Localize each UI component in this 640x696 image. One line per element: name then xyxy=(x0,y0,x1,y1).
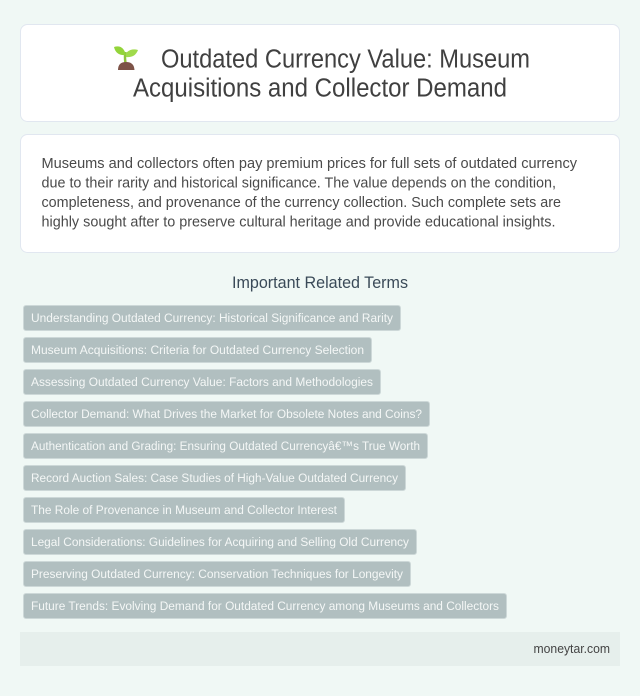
panel: description xyxy=(20,134,620,252)
list: related term tags: Collector Demand: What Drives the Market for Obsolete Notes and Coins? xyxy=(31,407,422,421)
title text: Acquisitions and Collector Demand xyxy=(133,74,507,102)
panel: description: completeness, and provenance of the currency collection. Such complete sets are xyxy=(42,194,561,211)
title text xyxy=(133,46,530,102)
panel: title card xyxy=(20,24,620,122)
list: related term tags: Understanding Outdated Currency: Historical Significance and Rarity xyxy=(31,311,394,325)
title text: Outdated Currency Value: Museum xyxy=(161,46,530,74)
footer: moneytar.com xyxy=(534,642,610,656)
footer xyxy=(20,632,620,666)
list: related term tags: Legal Considerations: Guidelines for Acquiring and Selling Old Currency xyxy=(31,535,410,549)
list: related term tags: Assessing Outdated Currency Value: Factors and Methodologies xyxy=(31,375,373,389)
icon: seedling xyxy=(114,46,138,70)
heading: related terms: Important Related Terms xyxy=(232,274,408,292)
list: related term tags: Authentication and Grading: Ensuring Outdated Currencyâ€™s True Worth xyxy=(31,439,420,453)
panel: description: Museums and collectors often pay premium prices for full sets of outdated currency xyxy=(42,155,577,172)
list: related term tags: Museum Acquisitions: Criteria for Outdated Currency Selection xyxy=(31,343,364,357)
panel: description: highly sought after to preserve cultural heritage and provide educational insights. xyxy=(42,214,556,230)
panel: description: due to their rarity and historical significance. The value depends on the condition, xyxy=(42,174,556,192)
list: related term tags: Record Auction Sales: Case Studies of High-Value Outdated Currency xyxy=(31,471,399,485)
list: related term tags: Preserving Outdated Currency: Conservation Techniques for Longevity xyxy=(31,567,404,581)
list: related term tags xyxy=(24,306,506,618)
list: related term tags: The Role of Provenance in Museum and Collector Interest xyxy=(31,503,338,517)
list: related term tags: Future Trends: Evolving Demand for Outdated Currency among Museums and Collectors xyxy=(31,599,499,613)
